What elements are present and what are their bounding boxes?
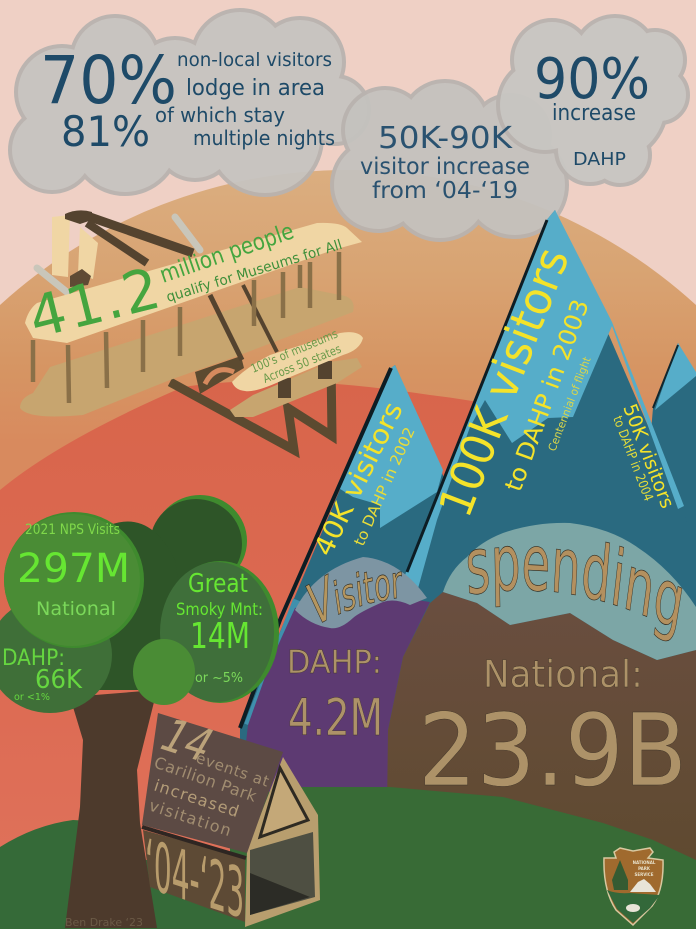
stat: visitor increase text in middle cloud: from ‘04-‘19: [372, 178, 518, 204]
stat: visitor increase text in middle cloud: [360, 121, 530, 204]
illustration: green hills: [0, 787, 696, 929]
text: events on hangar roof: 14: [150, 709, 223, 771]
illustration: tree trunk: [65, 690, 157, 928]
stat: national 23.9B spending: National:: [483, 653, 643, 696]
stat: Great Smoky Mountains visits: Smoky Mnt:: [176, 600, 263, 620]
stat: DAHP increase text in right cloud: increase: [552, 101, 636, 126]
stat: lodging text in left cloud: of which stay: [155, 103, 285, 127]
stat: national park visits: 297M: [17, 546, 130, 592]
stat: national park visits: National: [36, 598, 116, 620]
illustration: big mountain: [400, 210, 696, 760]
text: museums across states on small wing: 100's of museums: [249, 327, 340, 376]
cloud: right: [500, 18, 686, 183]
stat: lodging text in left cloud: 81%: [61, 107, 150, 156]
icon: National Park Service arrowhead: [604, 848, 663, 925]
text: events on hangar roof: Carilion Park: [152, 753, 260, 806]
stat: DAHP 4.2M spending: 4.2M: [288, 689, 383, 748]
illustration: wright brothers hangar: [142, 713, 320, 927]
stat: DAHP 4.2M spending: DAHP:: [287, 643, 382, 681]
cloud: middle: [334, 83, 565, 238]
heading: spending arched: spending: [468, 542, 682, 642]
stat: DAHP visits: DAHP:: [2, 646, 65, 671]
icon: National Park Service arrowhead: NATIONAL: [633, 860, 656, 865]
illustration: biplane: [20, 210, 363, 450]
stat: Great Smoky Mountains visits: or ~5%: [195, 671, 243, 686]
text: 40K visitors label: to DAHP in 2002: [350, 424, 419, 549]
text: museums for all on wing: qualify for Museums for All: [164, 237, 344, 306]
stat: DAHP increase text in right cloud: DAHP: [573, 149, 626, 170]
stat: DAHP visits: 66K: [35, 665, 83, 695]
stat: Great Smoky Mountains visits: Great: [188, 569, 248, 599]
text: museums for all on wing: million people: [156, 219, 297, 289]
text: 50K visitors label: 50K visitors: [618, 401, 678, 511]
text: museums across states on small wing: Across 50 states: [261, 342, 343, 386]
text: 100K visitors label: 100K visitors: [428, 240, 580, 524]
text: museums for all on wing: [22, 219, 344, 352]
stat: visitor increase text in middle cloud: visitor increase: [360, 154, 530, 180]
icon: National Park Service arrowhead: PARK: [638, 866, 651, 871]
stat: lodging text in left cloud: [40, 42, 335, 156]
panel: spending dome: [387, 523, 696, 880]
illustration: tree canopy: [0, 495, 279, 713]
stat: DAHP visits: or <1%: [14, 692, 50, 703]
text: events on hangar roof: [147, 709, 272, 840]
text: events on hangar roof: visitation: [147, 796, 233, 840]
stat: DAHP 4.2M spending: [287, 643, 383, 748]
illustration: left mountain: [240, 365, 445, 790]
heading: Visitor arched: Visitor: [305, 571, 402, 623]
text: museums for all on wing: 41.2: [22, 256, 166, 352]
cloud: left: [12, 12, 367, 193]
stat: national park visits: [17, 522, 130, 620]
text: 100K visitors label: to DAHP in 2003: [499, 296, 595, 495]
stat: Great Smoky Mountains visits: 14M: [190, 616, 250, 657]
stat: Great Smoky Mountains visits: [176, 569, 263, 686]
illustration: right small mountain: [640, 343, 696, 620]
text: events on hangar roof: increased: [152, 776, 241, 821]
icon: National Park Service arrowhead: SERVICE: [635, 872, 654, 877]
panel: visitor dome: [240, 557, 430, 795]
stat: DAHP increase text in right cloud: 90%: [534, 47, 650, 112]
text: 100K visitors label: Centennial of flight: [546, 354, 594, 453]
stat: lodging text in left cloud: 70%: [40, 42, 177, 119]
text: artist credit: Ben Drake ‘23: [65, 916, 143, 929]
stat: DAHP visits: [2, 646, 83, 703]
text: museums across states on small wing: [249, 327, 343, 386]
text: 50K visitors label: to DAHP in 2004: [609, 414, 656, 503]
stat: visitor increase text in middle cloud: 50K-90K: [378, 121, 513, 156]
stat: lodging text in left cloud: lodge in area: [186, 76, 325, 101]
stat: DAHP increase text in right cloud: [534, 47, 650, 170]
text: 40K visitors label: 40K visitors: [308, 397, 409, 561]
stat: lodging text in left cloud: non-local visitors: [177, 49, 332, 71]
text: events on hangar roof: events at: [194, 749, 272, 791]
stat: lodging text in left cloud: multiple nights: [193, 126, 335, 150]
stat: national park visits: 2021 NPS Visits: [25, 522, 120, 538]
